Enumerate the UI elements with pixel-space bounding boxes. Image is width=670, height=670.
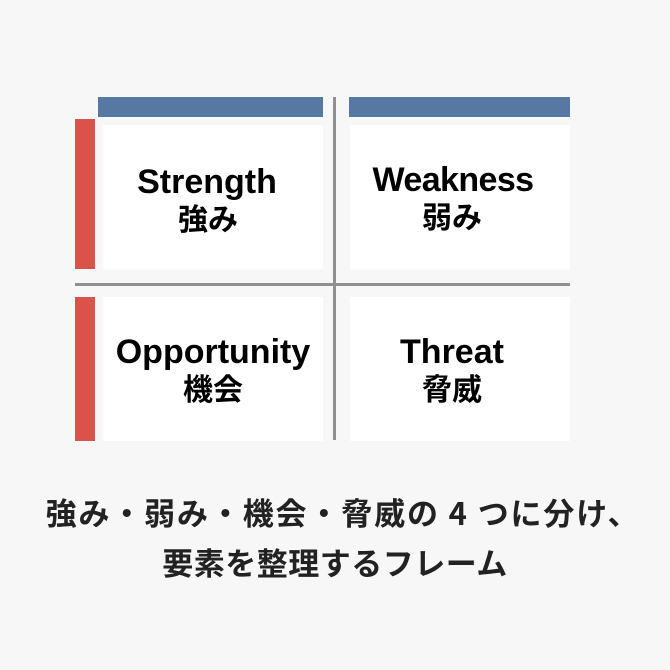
panel: Weakness (350, 125, 570, 269)
panel: Strength (103, 125, 323, 269)
label: Weakness: Weakness (373, 161, 533, 199)
header bar: blue left (98, 97, 323, 117)
label: Strength: Strength (137, 163, 277, 201)
panel: Opportunity (103, 297, 323, 441)
panel: Threat (350, 297, 570, 441)
side bar: red bottom (75, 297, 95, 441)
side bar: red top (75, 119, 95, 269)
label: Opportunity: Opportunity (116, 333, 310, 371)
caption line 1: 強み・弱み・機会・脅威の 4 つに分け、 (46, 489, 640, 534)
axis: vertical divider (333, 97, 336, 440)
label: 機会: 機会 (183, 365, 243, 409)
label: 脅威: 脅威 (422, 365, 482, 409)
label: 弱み: 弱み (422, 193, 482, 237)
label: 強み: 強み (178, 195, 238, 239)
caption line 2: 要素を整理するフレーム (162, 539, 508, 584)
header bar: blue right (349, 97, 570, 117)
label: Threat: Threat (400, 333, 504, 371)
axis: horizontal divider (75, 283, 570, 286)
